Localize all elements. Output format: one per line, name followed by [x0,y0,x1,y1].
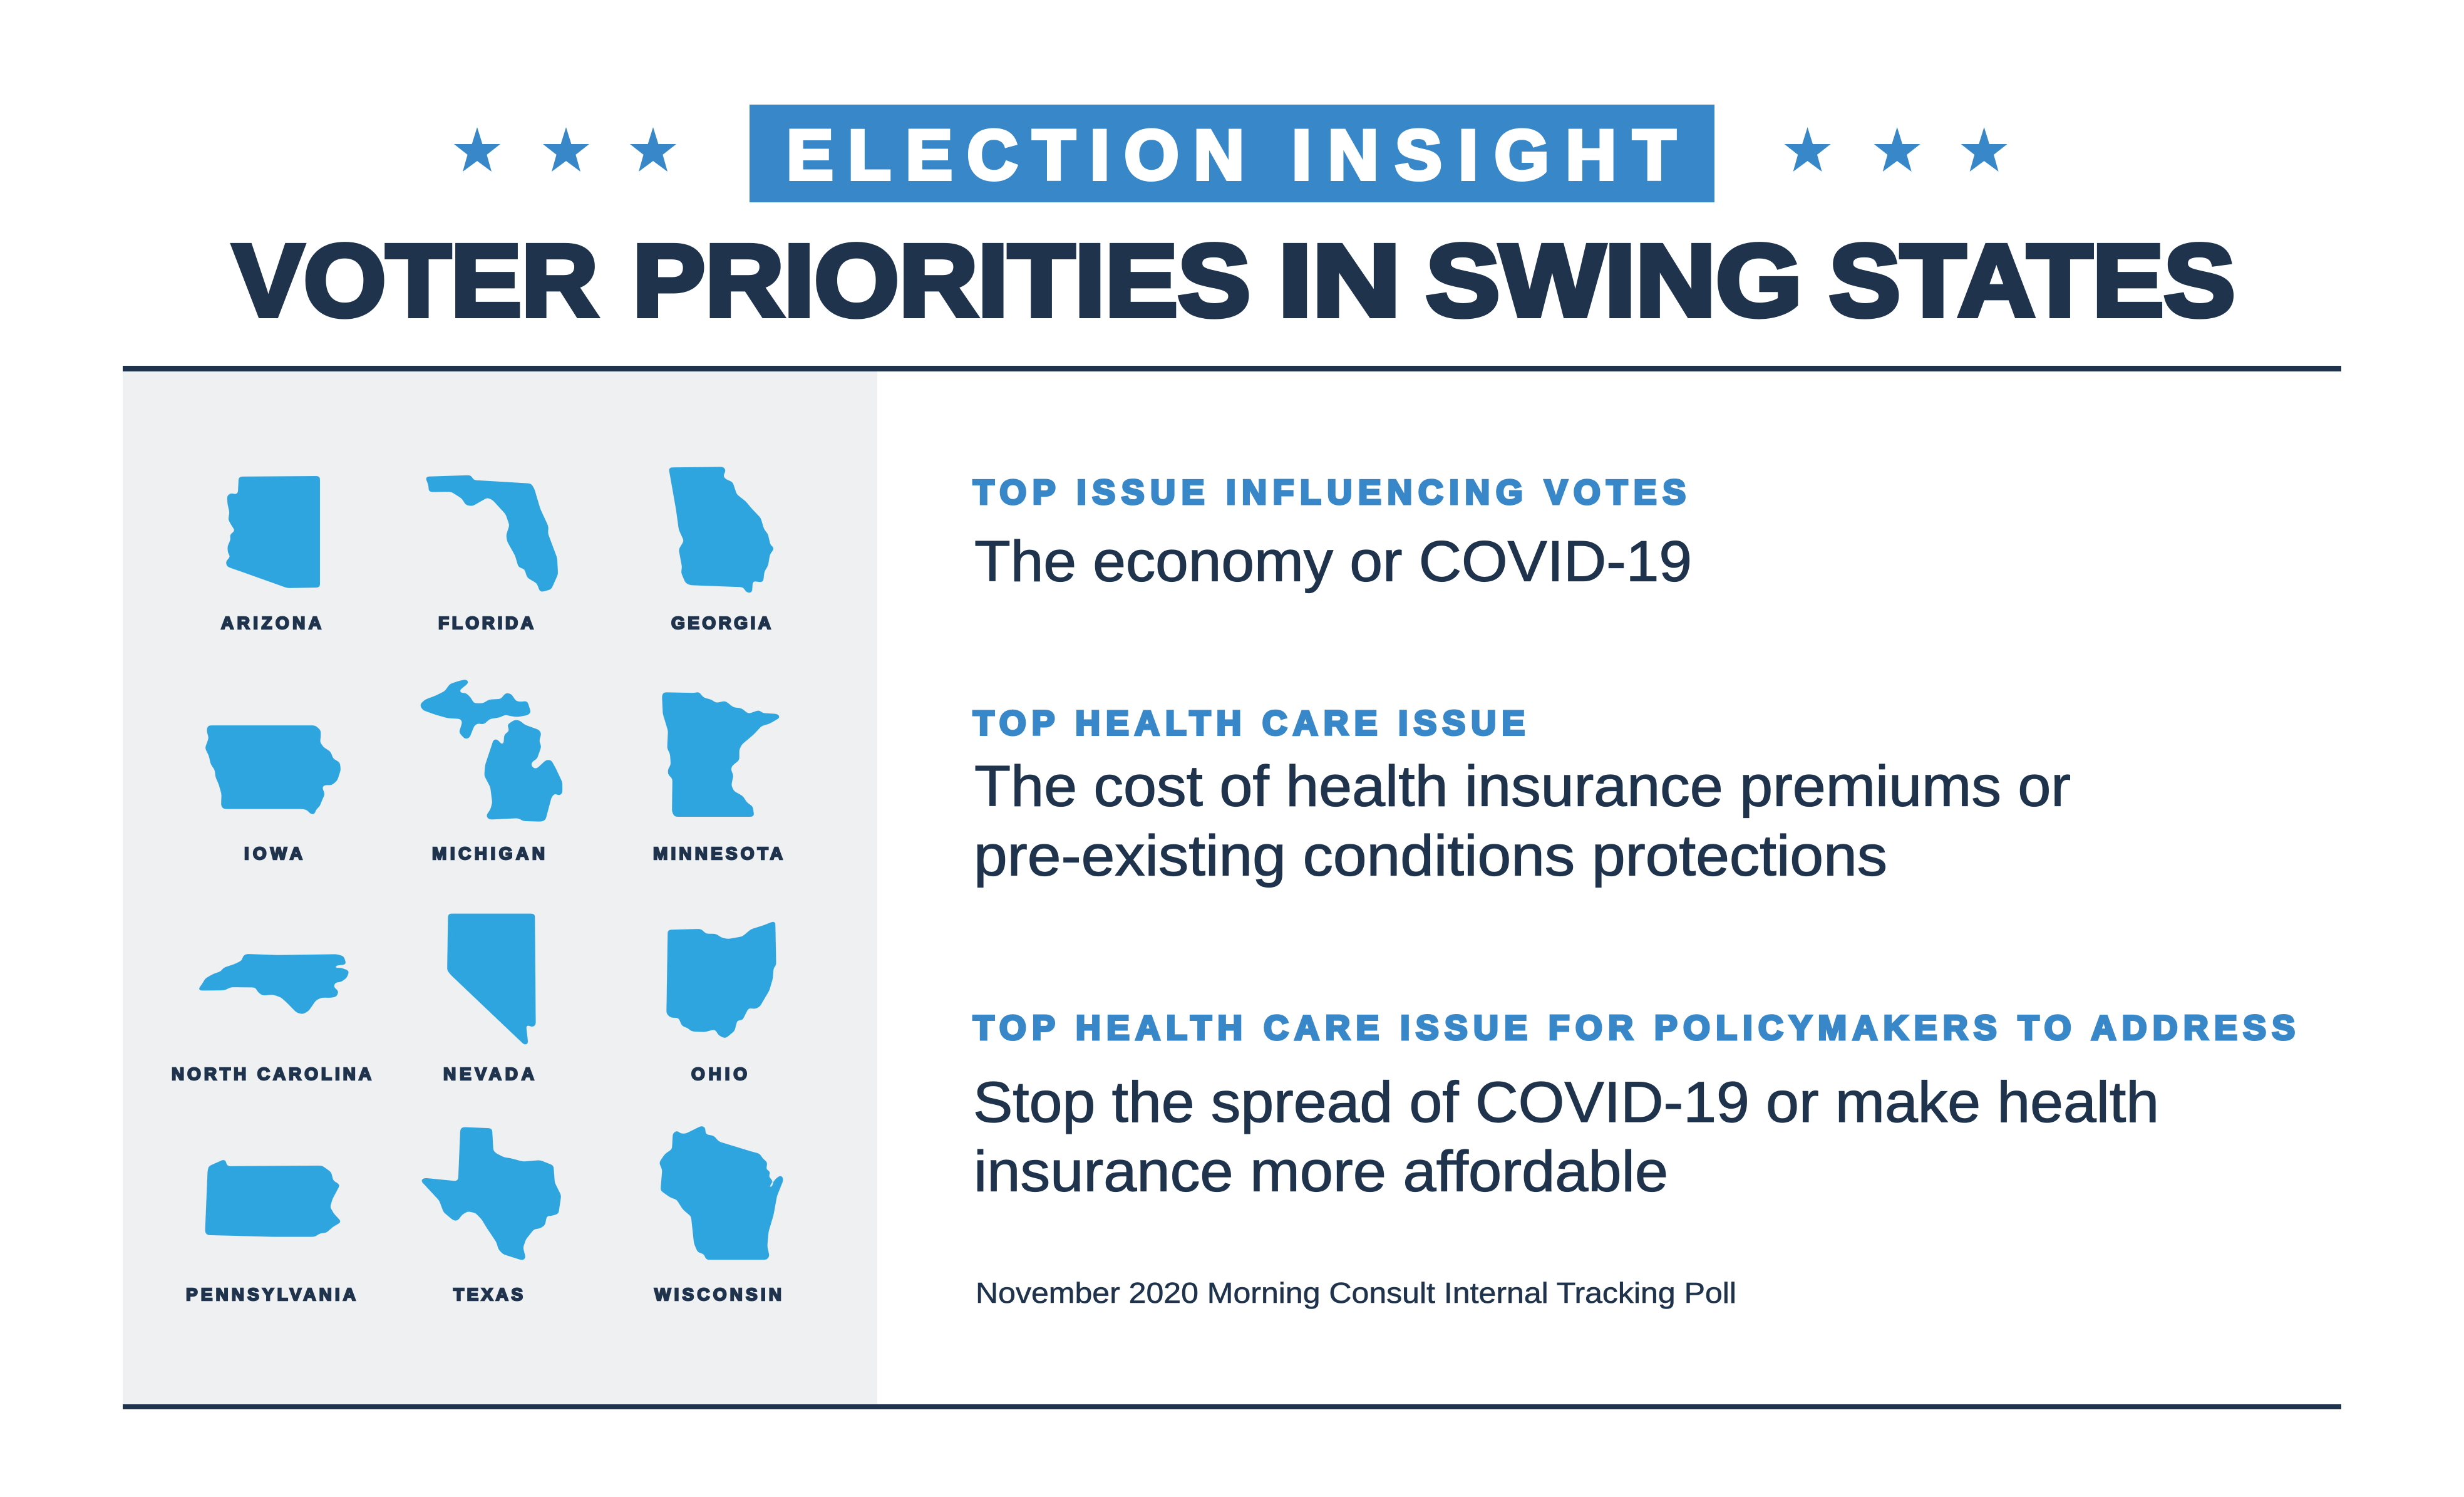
title: PRIORITIES [632,223,1250,338]
icon: Texas [422,1128,560,1260]
title: STATES [1829,223,2235,338]
state name labels: GEORGIA [671,613,771,633]
state name labels: MINNESOTA [653,844,783,863]
icon: Arizona [227,477,319,587]
icon: Florida [426,476,557,591]
state name labels: IOWA [244,844,302,863]
banner: election insight: ELECTION [786,116,1244,194]
block: top issue influencing votes: TOP ISSUE INFLUENCING VOTES [973,472,1686,511]
icon: Iowa [206,727,339,814]
top rule [123,366,2341,371]
source note: November 2020 Morning Consult Internal Tracking Poll [976,1277,1736,1309]
block: top health care issue: TOP HEALTH CARE ISSUE [973,703,1525,742]
block: top health care issue for policymakers: insurance more affordable [974,1139,1668,1203]
title [233,223,2235,338]
bottom rule [123,1404,2341,1409]
state name labels: FLORIDA [438,613,534,633]
state name labels: MICHIGAN [432,844,545,863]
block: top issue influencing votes: The economy or COVID-19 [974,530,1692,594]
state maps row 3 and 4 [199,914,782,1260]
state name labels: WISCONSIN [654,1285,781,1304]
panel: swing states [123,371,877,1404]
banner: election insight: INSIGHT [1292,116,1676,194]
block: top health care issue: The cost of health insurance premiums or [974,755,2071,819]
title: IN [1278,223,1401,338]
block: top health care issue for policymakers [973,1008,2295,1203]
icon: Ohio [668,922,775,1037]
block: top health care issue for policymakers: TOP HEALTH CARE ISSUE FOR POLICYMAKERS TO ADDRESS [973,1008,2295,1047]
icon: Pennsylvania [206,1161,340,1236]
banner: election insight [750,105,1714,202]
title: SWING [1426,223,1802,338]
state name labels [172,613,783,1304]
icon: Michigan [421,680,561,821]
icon: Nevada [448,914,535,1044]
state name labels: OHIO [691,1064,747,1084]
state name labels: ARIZONA [221,613,321,633]
block: top issue influencing votes [973,472,1692,594]
state name labels: NORTH CAROLINA [172,1064,371,1084]
state name labels: PENNSYLVANIA [186,1285,356,1304]
block: top health care issue for policymakers: Stop the spread of COVID-19 or make health [973,1070,2159,1134]
state name labels: TEXAS [453,1285,523,1304]
icon: North Carolina [199,955,348,1013]
icon: Minnesota [663,693,779,816]
icon: Georgia [670,468,773,592]
block: top health care issue [973,703,2071,888]
state name labels: NEVADA [443,1064,534,1084]
state maps row 1 and 2 [206,468,779,821]
left stars [454,127,676,172]
right stars [1785,127,2008,172]
block: top health care issue: pre-existing conditions protections [974,824,1887,888]
title: VOTER [233,223,598,338]
icon: Wisconsin [661,1127,782,1259]
